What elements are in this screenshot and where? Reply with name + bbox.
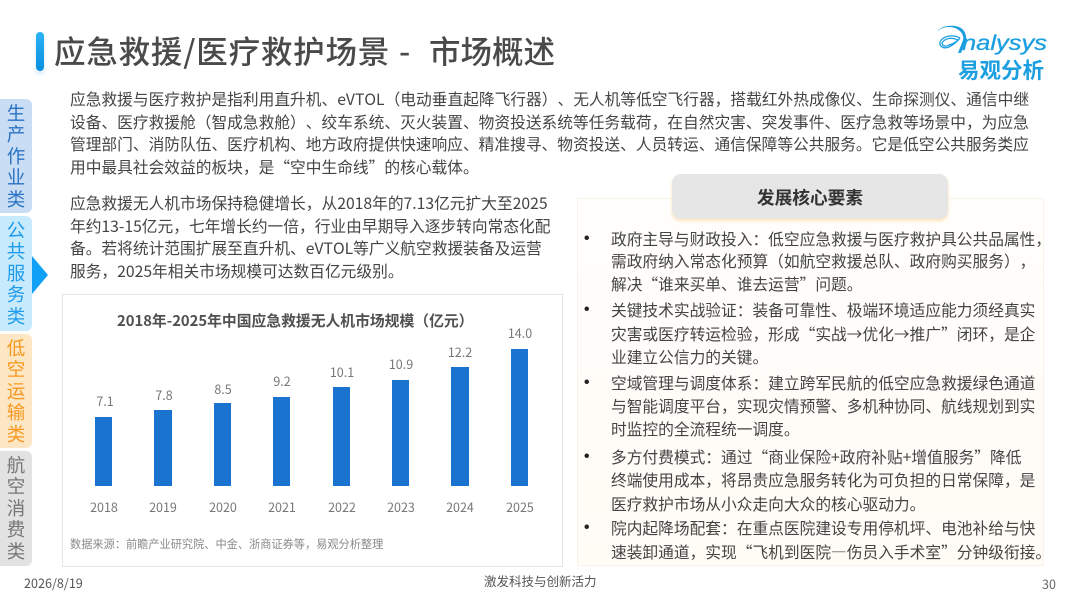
year axis labels: 2018 [90, 497, 118, 516]
footer date: 2026/8/19 [24, 573, 83, 592]
bar value labels: 10.1 [330, 362, 354, 381]
intro paragraph: 设备、医疗救援舱（智成急救舱）、绞车系统、灭火装置、物资投送系统等任务载荷，在自然灾害、突发事件、医疗急救等场景中，为应急 [70, 110, 1029, 132]
side tab: 生产作业类 [0, 99, 32, 213]
factor: multiple payment [584, 445, 1035, 514]
side tab: 低空运输类: 空 [7, 356, 25, 382]
side tab: 生产作业类: 作 [7, 143, 25, 169]
factor: airspace management: 时监控的全流程统一调度。 [611, 417, 800, 440]
title: - [399, 27, 410, 73]
side tab: 公共服务类: 类 [7, 303, 25, 329]
intro paragraph [70, 87, 1029, 178]
factor: technology validation: • [584, 301, 590, 318]
intro paragraph: 用中最具社会效益的板块，是“空中生命线”的核心载体。 [70, 154, 479, 178]
factor: technology validation: 关键技术实战验证：装备可靠性、极端环境适应能力须经真实 [611, 298, 1035, 321]
side tab: 生产作业类: 类 [7, 186, 25, 212]
logo wordmark: nalysys [962, 32, 1048, 55]
year axis labels: 2019 [149, 497, 177, 516]
side tab: 低空运输类: 类 [7, 421, 25, 447]
icon: logo swoosh [937, 26, 966, 53]
market summary paragraph: 年约13-15亿元，七年增长约一倍，行业由早期导入逐步转向常态化配 [70, 214, 550, 236]
panel heading: 发展核心要素 [672, 174, 948, 219]
market summary paragraph: 备。若将统计范围扩展至直升机、eVTOL等广义航空救援装备及运营 [70, 236, 542, 259]
bar value labels: 14.0 [508, 323, 532, 342]
bar value labels: 8.5 [214, 379, 232, 398]
factor: multiple payment: 多方付费模式：通过“商业保险+政府补贴+增值服务”降低 [611, 445, 1021, 468]
side tab: 生产作业类: 生 [7, 100, 25, 126]
side tab: 低空运输类: 低 [7, 334, 25, 360]
factor: hospital landing sites [584, 516, 1051, 562]
year axis labels: 2022 [328, 497, 356, 516]
year axis labels: 2020 [209, 497, 237, 516]
factor: government leadership: 解决“谁来买单、谁去运营”问题。 [611, 272, 862, 294]
logo chinese name: 易观分析 [958, 54, 1044, 85]
factor: hospital landing sites: 速装卸通道，实现“飞机到医院—伤员入手术室”分钟级衔接。 [611, 540, 1051, 562]
factor: airspace management: 空域管理与调度体系：建立跨军民航的低空应急救援绿色通道 [611, 371, 1035, 394]
year axis labels: 2023 [387, 497, 415, 516]
side tab: 航空消费类: 消 [7, 495, 25, 521]
bar value labels: 10.9 [389, 354, 413, 373]
factor: hospital landing sites: 院内起降场配套：在重点医院建设专用停机坪、电池补给与快 [611, 516, 1035, 539]
arrow: active tab marker [32, 256, 48, 294]
footer center text: 激发科技与创新活力 [484, 571, 597, 590]
page number: 30 [1042, 574, 1056, 593]
factor: government leadership: 政府主导与财政投入：低空应急救援与医疗救护具公共品属性， [611, 227, 1051, 250]
side tab: 航空消费类: 费 [7, 516, 25, 542]
factor: hospital landing sites: • [584, 519, 590, 536]
factor: multiple payment: • [584, 448, 590, 465]
market summary paragraph: 应急救援无人机市场保持稳健增长，从2018年的7.13亿元扩大至2025 [70, 191, 548, 214]
side tab: 低空运输类 [0, 334, 32, 448]
side tab: 公共服务类 [0, 216, 32, 331]
side tab: 生产作业类: 产 [7, 121, 25, 147]
bar value labels: 7.1 [96, 391, 114, 410]
side tab: 生产作业类: 业 [7, 164, 25, 190]
factor: airspace management: • [584, 374, 590, 391]
factor: multiple payment: 终端使用成本，将昂贵应急服务转化为可负担的日常保障，是 [611, 468, 1035, 491]
chart title: 2018年-2025年中国应急救援无人机市场规模（亿元） [117, 310, 473, 331]
factor: government leadership [584, 227, 1051, 294]
market summary paragraph: 服务，2025年相关市场规模可达数百亿元级别。 [70, 258, 404, 282]
bar value labels: 9.2 [273, 371, 291, 390]
factor: technology validation: 灾害或医疗转运检验，形成“实战→优化→推广”闭环，是企 [611, 322, 1035, 344]
bar value labels: 12.2 [448, 342, 472, 361]
side tab: 公共服务类: 公 [7, 216, 25, 242]
factor: government leadership: 需政府纳入常态化预算（如航空救援总队、政府购买服务）， [611, 249, 1035, 272]
side tab: 公共服务类: 务 [7, 281, 25, 307]
side tab: 航空消费类: 空 [7, 473, 25, 499]
year axis labels: 2025 [506, 497, 534, 516]
factor: technology validation: 业建立公信力的关键。 [611, 344, 768, 368]
data source note: 数据来源：前瞻产业研究院、中金、浙商证券等，易观分析整理 [70, 536, 383, 552]
title: 应急救援/医疗救护场景 [54, 27, 390, 73]
factor: government leadership: • [584, 230, 590, 247]
year axis labels [90, 497, 534, 516]
panel heading: 发展核心要素: 发展核心要素 [757, 184, 863, 210]
side tab: 航空消费类 [0, 451, 32, 566]
factor: technology validation [584, 298, 1035, 368]
year axis labels: 2024 [446, 497, 474, 516]
bar value labels: 7.8 [155, 385, 173, 404]
panel: bar chart [62, 294, 563, 567]
title accent bar [36, 32, 44, 71]
factor: multiple payment: 医疗救护市场从小众走向大众的核心驱动力。 [611, 492, 925, 514]
bar value labels [96, 323, 532, 410]
factor: airspace management: 与智能调度平台，实现灾情预警、多机种协同、航线规划到实 [611, 394, 1035, 417]
intro paragraph: 应急救援与医疗救护是指利用直升机、eVTOL（电动垂直起降飞行器）、无人机等低空飞行器，搭载红外热成像仪、生命探测仪、通信中继 [70, 87, 1029, 110]
side tab: 低空运输类: 输 [7, 399, 25, 425]
logo: Analysys 易观分析 [937, 26, 1048, 85]
title [54, 27, 555, 73]
side tab: 航空消费类: 航 [7, 452, 25, 478]
side tab: 低空运输类: 运 [7, 378, 25, 404]
side tab: 航空消费类: 类 [7, 538, 25, 564]
factor: airspace management [584, 371, 1035, 440]
year axis labels: 2021 [268, 497, 296, 516]
side tab: 公共服务类: 共 [7, 238, 25, 264]
panel: core development factors [577, 198, 1044, 566]
market summary paragraph [70, 191, 550, 282]
side tab: 公共服务类: 服 [7, 260, 25, 286]
intro paragraph: 管理部门、消防队伍、医疗机构、地方政府提供快速响应、精准搜寻、物资投送、人员转运、通信保障等公共服务。它是低空公共服务类应 [70, 132, 1029, 155]
bars [95, 349, 528, 486]
title: 市场概述 [429, 27, 555, 73]
